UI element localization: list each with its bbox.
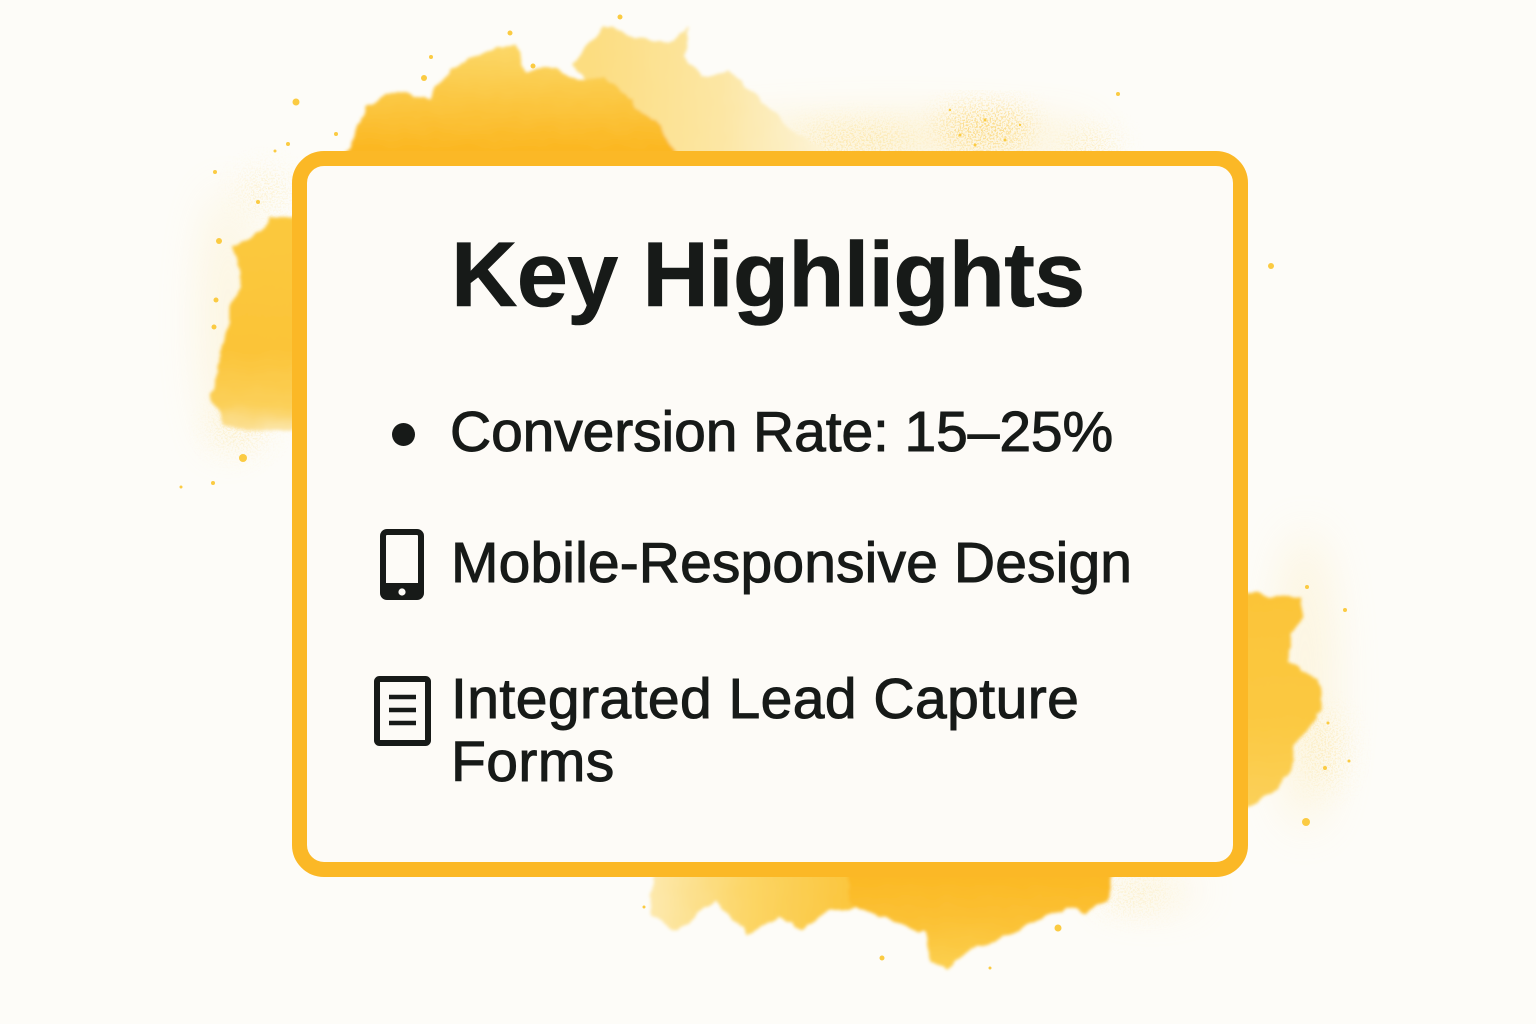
lead capture text: Integrated Lead Capture [451, 667, 1079, 731]
lead capture text [451, 667, 1079, 794]
icon: bullet [392, 423, 415, 446]
splash: bottom [652, 855, 1117, 970]
splash: top [345, 27, 825, 175]
conversion rate text: Conversion Rate: 15–25% [450, 400, 1113, 464]
soft mist halo [202, 108, 1347, 909]
icon: mobile phone [380, 529, 424, 600]
lead capture text: Forms [451, 730, 615, 794]
title: Key Highlights [451, 224, 1085, 326]
paint droplets [180, 14, 1350, 970]
icon: form document [374, 676, 431, 746]
mobile responsive text: Mobile-Responsive Design [451, 531, 1132, 595]
splash: left [212, 217, 310, 432]
highlights card [292, 151, 1248, 877]
splash: right [1225, 592, 1323, 812]
